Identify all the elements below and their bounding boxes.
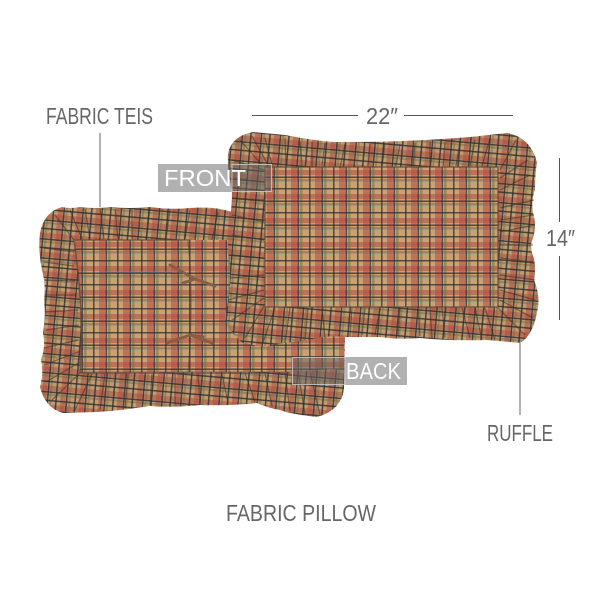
leader line: ruffle [519,343,521,415]
callout: BACK: BACK [346,358,402,384]
back pillow ruffle [39,207,345,417]
caption: FABRIC PILLOW: FABRIC PILLOW [226,500,376,526]
pillow: front view [225,132,538,347]
upper fabric tie [170,265,215,286]
back pillow seam shading [74,240,290,373]
back ruffle pleats [44,208,320,415]
front pillow centre panel [265,167,498,307]
label: RUFFLE: RUFFLE [487,420,553,446]
callout: FRONT [158,164,272,192]
leader line: fabric ties [99,133,101,207]
back pillow opening seam [100,271,172,273]
dimension: width 22 inches: 22″ [366,103,398,129]
front ruffle pleats [228,136,535,345]
lower fabric tie [167,335,212,343]
callout: FRONT: FRONT [164,165,246,191]
callout: BACK [292,357,407,385]
label: FABRIC TEIS: FABRIC TEIS [46,103,153,129]
dimension: height 14 inches: 14″ [546,225,575,251]
front pillow ruffle [225,132,538,347]
pillow: back view [39,207,345,417]
front pillow seam [265,167,498,307]
back pillow centre panel [74,240,344,373]
